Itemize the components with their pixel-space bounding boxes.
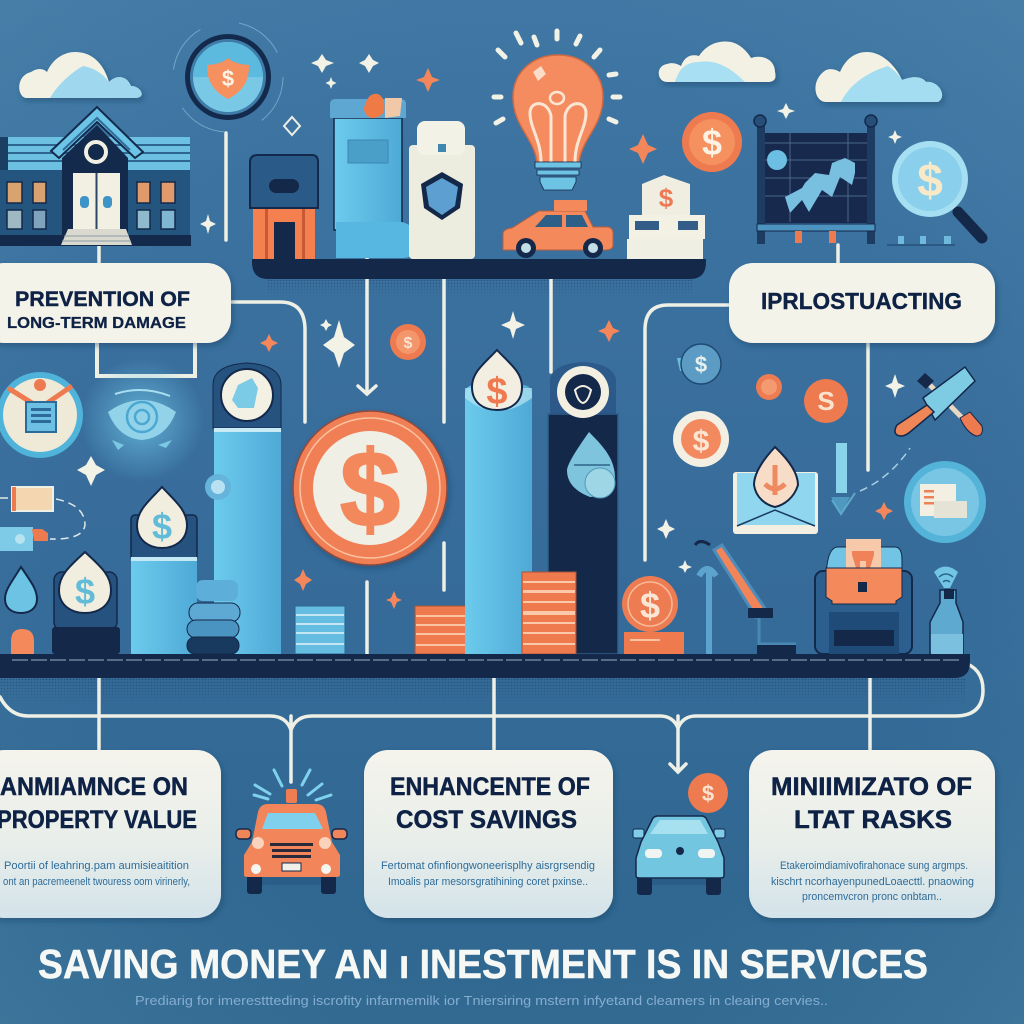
icon: hammer and knife tools	[895, 367, 982, 436]
icon: orange stub	[11, 629, 34, 654]
icon: white ringed coin	[673, 411, 729, 467]
card: minimization of risks: proncemvcron pronc onbtam..	[802, 891, 942, 903]
icon: small orange coin: $	[404, 335, 413, 352]
bar: light blue short: $	[152, 506, 172, 547]
bar: navy tall with drop	[548, 362, 618, 654]
icon: small orange coin	[390, 324, 426, 360]
icon: white panel with shield	[409, 121, 475, 259]
icon: water drop left	[5, 567, 37, 613]
icon: blue car front with coin	[633, 773, 728, 895]
card: minimization of risks: Etakeroimdiamivofirahonace sung argmps.	[780, 860, 968, 872]
icon: blue pillar	[330, 94, 418, 258]
cloud left	[19, 52, 142, 98]
icon: blue car front with coin: $	[702, 781, 714, 806]
big dollar coin	[293, 411, 447, 565]
icon: shield badge	[173, 22, 283, 132]
icon: orange car side	[503, 200, 613, 258]
bar: tall light blue	[205, 363, 281, 654]
icon: blue dollar coin small	[677, 344, 721, 384]
icon: mop and squeegee	[695, 542, 796, 654]
card: minimization of risks	[749, 750, 995, 918]
big dollar coin: $	[340, 428, 400, 549]
card: cost savings: Imoalis par mesorsgratihining coret pxinse..	[388, 876, 588, 888]
card: minimization of risks: LTAT RASKS	[794, 806, 952, 834]
icon: orange dollar coin	[682, 112, 742, 172]
cloud middle	[659, 42, 776, 82]
card: property value: ANMIAMNCE ON	[0, 773, 188, 801]
subtitle: Prediarig for imeresttteding iscrofity infarmemilk ior Tniersiring mstern infyetand cleamers in cleaing cervies..	[135, 993, 828, 1008]
icon: printer chair	[815, 539, 912, 654]
decorative outline diamond	[284, 117, 300, 135]
arrow: blue down	[831, 443, 910, 514]
card: iprlostuacting: IPRLOSTUACTING	[761, 288, 962, 314]
card: prevention of long-term damage	[0, 263, 231, 343]
bar: small with drop badge	[52, 552, 120, 654]
icon: envelope with drop	[733, 447, 818, 534]
icon: lightbulb	[494, 31, 620, 190]
icon: shield badge: $	[222, 66, 234, 91]
icon: coin on box	[622, 576, 684, 654]
icon: white ringed coin: $	[693, 425, 710, 458]
icon: coin on box: $	[640, 585, 660, 626]
cloud right	[815, 52, 942, 102]
icon: orange S coin	[804, 379, 848, 423]
card: cost savings	[364, 750, 613, 918]
card: property value	[0, 750, 221, 918]
card: prevention of long-term damage: PREVENTION OF	[15, 288, 190, 311]
decorative orange sparkles	[260, 68, 893, 609]
top shelf	[252, 259, 706, 279]
icon: small coin	[756, 374, 782, 400]
card: prevention of long-term damage: LONG-TERM DAMAGE	[7, 315, 186, 332]
card: cost savings: Fertomat ofinfiongwoneerisplhy aisrgrsendig	[381, 860, 595, 872]
card: iprlostuacting	[729, 263, 995, 343]
icon: orange dollar coin: $	[702, 122, 722, 163]
icon: orange S coin: S	[817, 386, 835, 416]
card: property value: Poortii of leahring.pam aumisieaitition	[4, 860, 189, 872]
icon: spray bottle	[930, 566, 963, 654]
icon: envelope badge left	[0, 372, 83, 458]
icon: chart board	[754, 115, 877, 244]
coin stack blue pills	[187, 580, 240, 654]
icon: blue dollar coin small: $	[695, 352, 707, 377]
icon: orange storefront	[250, 155, 318, 259]
connector lines	[0, 133, 983, 782]
coin stack blue	[295, 606, 345, 654]
card: cost savings: COST SAVINGS	[396, 806, 577, 834]
coin stack orange	[415, 606, 468, 654]
card: minimization of risks: MINIIMIZATO OF	[771, 773, 972, 801]
icon: white building with dollar: $	[659, 183, 674, 213]
icon: house	[0, 107, 191, 246]
card: property value: ont an pacremeenelt twouress oom virinerly,	[3, 876, 190, 888]
decorative sparkles	[77, 54, 905, 573]
card: property value: PROPERTY VALUE	[0, 806, 197, 834]
icon: orange car front	[236, 770, 347, 894]
bar: light blue tall with drop	[465, 350, 532, 654]
icon: white building with dollar	[627, 175, 705, 259]
bar: light blue short	[131, 487, 197, 654]
card: cost savings: ENHANCENTE OF	[390, 773, 590, 801]
coin stack orange tall	[522, 572, 576, 654]
icon: document badge right	[904, 461, 986, 543]
icon: sliders and card left	[0, 487, 85, 551]
title: SAVING MONEY AN ı INESTMENT IS IN SERVICES	[38, 941, 928, 987]
icon: magnifier dollar: $	[917, 154, 943, 206]
icon: glowing eye	[80, 358, 204, 482]
icon: magnifier dollar	[887, 141, 982, 246]
bottom shelf	[0, 654, 970, 678]
bar: light blue tall with drop: $	[486, 371, 508, 413]
bar: small with drop badge: $	[75, 571, 95, 612]
card: minimization of risks: kischrt ncorhayenpunedLoaecttl. pnaowing	[771, 876, 974, 888]
